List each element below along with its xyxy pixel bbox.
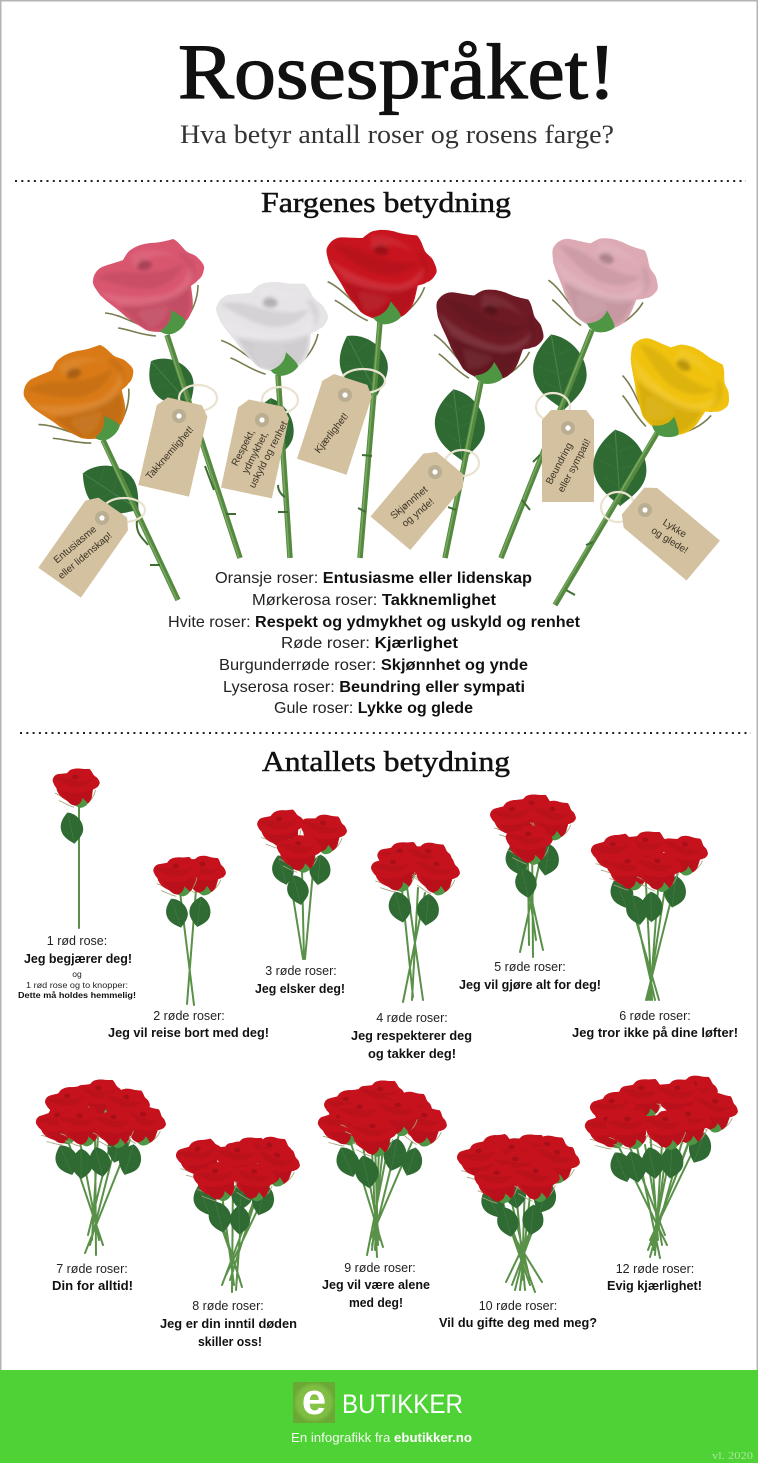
logo: ebutikker: e [302,1375,326,1424]
label: 5 roses [459,960,601,992]
label: 4 roses: 4 røde roser: [376,1011,448,1025]
colour meanings list [168,570,581,717]
bouquet: 7 roses [36,1073,171,1255]
label: 3 roses: Jeg elsker deg! [255,981,345,996]
yellow rose: Lykke [660,517,689,541]
bouquet: 8 roses [175,1128,305,1292]
label: 4 roses: og takker deg! [368,1046,456,1061]
label: 9 roses: 9 røde roser: [344,1261,416,1275]
white rose [204,266,334,558]
bouquet: 1 rose [48,762,102,928]
colour meanings list: Mørkerosa roser: Takknemlighet [252,592,497,609]
yellow rose [554,312,746,605]
label: 1 rose: 1 rød rose: [47,934,107,948]
bouquet: 9 roses [318,1074,452,1257]
label: 10 roses [439,1299,597,1330]
colour meanings list: Lyserosa roser: Beundring eller sympati [223,679,525,696]
subtitle: Hva betyr antall roser og rosens farge? [180,120,614,149]
footer [0,1370,758,1463]
label: 6 roses: 6 røde roser: [619,1009,691,1023]
orange rose: Entusiasme [52,524,99,566]
white rose: ydmykhet, [241,430,271,476]
label: 1 rose: Jeg begjærer deg! [24,951,132,966]
label: 7 roses: 7 røde roser: [56,1262,128,1276]
label: 1 rose [18,934,136,1000]
label: 8 roses: skiller oss! [198,1334,262,1349]
label: 8 roses: Jeg er din inntil døden [160,1316,297,1331]
bouquet: 2 roses [150,847,230,1005]
colour meanings list: Gule roser: Lykke og glede [274,700,473,717]
label: 6 roses: Jeg tror ikke på dine løfter! [572,1025,738,1040]
light pink rose: Beundring [544,441,575,487]
label: 1 rose: Dette må holdes hemmelig! [18,990,136,1000]
label: 9 roses: Jeg vil være alene [322,1277,430,1292]
logo: ebutikker: BUTIKKER [342,1389,463,1419]
logo: ebutikker [293,1375,463,1424]
label: 2 roses: 2 røde roser: [153,1009,225,1023]
orange rose: eller lidenskap! [56,530,114,582]
label: 4 roses [351,1011,472,1061]
label: 5 roses: Jeg vil gjøre alt for deg! [459,977,601,992]
label: 4 roses: Jeg respekterer deg [351,1028,472,1043]
bouquet: 10 roses [456,1127,585,1292]
red rose: Kjærlighet! [313,411,351,456]
label: 12 roses: Evig kjærlighet! [607,1278,702,1293]
burgundy rose: Skjønnhet [389,484,430,522]
label: 3 roses [255,964,345,996]
orange rose [20,342,178,600]
colour meanings list: Oransje roser: Entusiasme eller lidenskap [215,570,532,587]
label: 10 roses: 10 røde roser: [479,1299,557,1313]
light pink rose: eller sympati! [556,437,593,494]
bouquet: 6 roses [590,825,712,1000]
light pink rose [500,210,671,558]
bouquet: 3 roses [255,806,351,959]
label: 1 rose: og [72,969,82,979]
label: 9 roses [322,1261,430,1310]
bouquet: 4 roses [369,834,464,1002]
red rose [297,208,446,558]
label: 5 roses: 5 røde roser: [494,960,566,974]
colour meanings list: Røde roser: Kjærlighet [281,635,459,652]
label: 9 roses: med deg! [349,1295,403,1310]
label: 10 roses: Vil du gifte deg med meg? [439,1315,597,1330]
label: 12 roses: 12 røde roser: [616,1262,694,1276]
burgundy rose: og ynde! [400,497,437,530]
label: 12 roses [607,1262,702,1293]
bouquet: 5 roses [488,788,580,957]
label: 7 roses: Din for alltid! [52,1278,133,1293]
heading: number meaning: Antallets betydning [262,747,510,778]
white rose: Respekt, [230,428,258,468]
dark pink rose [93,239,240,558]
colour meanings list: Hvite roser: Respekt og ydmykhet og uskyld og renhet [168,614,581,631]
label: 1 rose: 1 rød rose og to knopper: [26,980,128,990]
label: 8 roses [160,1299,297,1349]
label: 6 roses [572,1009,738,1040]
version note: vl. 2020 [712,1450,754,1462]
footer credit: En infografikk fra ebutikker.no [291,1431,472,1445]
label: 2 roses: Jeg vil reise bort med deg! [108,1025,269,1040]
white rose: uskyld og renhet [247,419,290,490]
label: 2 roses [108,1009,269,1040]
label: 3 roses: 3 røde roser: [265,964,337,978]
dark pink rose: Takknemlighet! [144,425,196,482]
label: 8 roses: 8 røde roser: [192,1299,264,1313]
colour meanings list: Burgunderrøde roser: Skjønnhet og ynde [219,657,528,674]
title: Rosespråket! [178,28,616,115]
heading: colour meaning: Fargenes betydning [261,188,511,219]
burgundy rose [371,263,556,558]
yellow rose: og glede! [649,525,690,556]
label: 7 roses [52,1262,133,1293]
bouquet: 12 roses [585,1068,743,1258]
panel: coloured roses with tags [20,208,746,605]
